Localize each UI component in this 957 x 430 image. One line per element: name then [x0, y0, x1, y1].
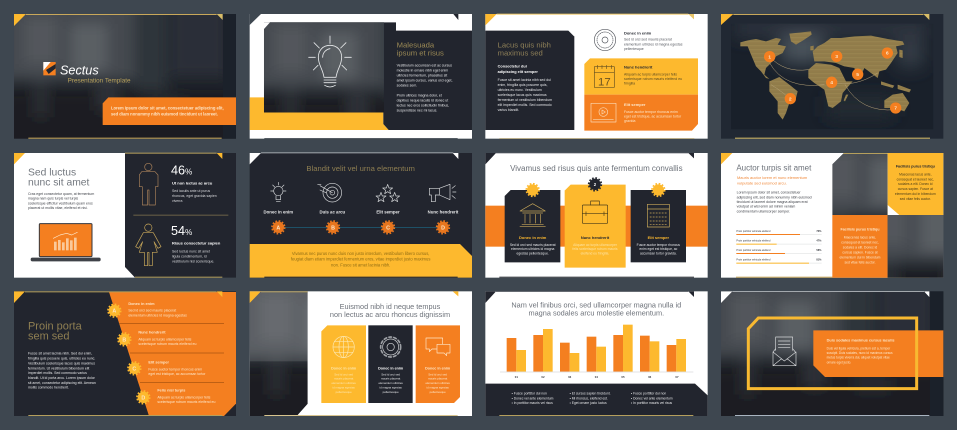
slide 4: world map	[721, 14, 943, 139]
slide 8: progress bars	[721, 153, 944, 278]
card: globe: mauris placerat	[334, 377, 354, 381]
list item B: Nunc hendrerit	[138, 331, 166, 335]
list item D: scelerisque rutrum mauris eleifend eu	[157, 400, 215, 404]
heading	[28, 321, 83, 343]
bar chart: 01	[515, 375, 518, 379]
yellow band: feugiat diam etiam imperdiet fermentum eros, vitae imperdiet justo maximus	[291, 257, 430, 262]
yellow band: Vivamus nec purus nunc duis non justo interdum, vestibulum libero cursus,	[292, 251, 429, 256]
card: speech bubbles: pellentesque	[430, 390, 446, 394]
card: globe: Sed id orci sed	[334, 372, 353, 376]
list item D: Aliquam ac turpis ullamcorper felis	[157, 395, 211, 399]
bar chart: 07	[675, 375, 679, 379]
icon: female figure	[136, 224, 161, 266]
slide 12: closing contact	[721, 291, 944, 416]
yellow box: sed vitae felis auctor.	[900, 197, 931, 201]
list item B: scelerisque rutrum mauris eleifend eu	[138, 342, 196, 346]
feature: Donec in enim: pellentesque	[624, 47, 644, 51]
badge letters: B	[331, 225, 335, 231]
list item D: D	[141, 395, 145, 401]
progress bars: Proin porttitor vehicula eleifend	[736, 240, 771, 243]
list item D	[137, 389, 215, 404]
heading: Sed luctus	[28, 168, 76, 179]
progress bars: 58%	[816, 249, 822, 252]
body text: dapibus neque iaculis id donec ut	[397, 98, 448, 102]
slide 2: lightbulb	[250, 14, 472, 139]
yellow band: non. Fusce sit amet lacinia nibh.	[331, 263, 390, 268]
labels: Elit semper	[376, 209, 400, 214]
progress bars: Proin porttitor vehicula eleifend	[736, 259, 771, 262]
heading: sem sed	[28, 331, 70, 343]
card: Elit semper: Elit semper	[648, 235, 670, 240]
body text: magna nam quis turpis vel turpis	[28, 197, 78, 201]
orange callout: Duis vel ligula vehicula, pretium est a, tempor	[827, 346, 890, 350]
dark text panel: fermentum ut vestibulum bibendum	[498, 98, 552, 102]
map routes	[770, 57, 896, 110]
progress bars: 73%	[816, 230, 822, 233]
body text: Fusce sit amet lacinia nibh. Sed dui enim,	[28, 352, 92, 356]
badge letters: D	[441, 225, 445, 231]
row 3 slides 11 and 12	[485, 291, 944, 416]
body text: scelerisque efficitur vestibulum quam eros	[28, 201, 93, 205]
stat: 46%: Sed iaculis ante ut purus	[172, 189, 210, 193]
orange callout	[813, 330, 943, 377]
body text: Proin ultrices magna dolor, et	[397, 93, 442, 97]
heading	[28, 168, 90, 189]
feature: Elit semper: gravida	[624, 119, 635, 123]
body text: volutpat ut wisi enim ad minim veniam	[737, 205, 795, 209]
dark list band: • Mi rhoncus, eleifend est.	[570, 396, 608, 400]
card: Donec in enim: Donec in enim	[519, 235, 547, 240]
heading: Auctor turpis sit amet	[736, 163, 812, 172]
dark text panel: Consectetur dui	[498, 65, 527, 69]
subheading	[737, 175, 808, 185]
icon: lightbulb	[309, 36, 351, 87]
dark text panel: Fusce sit amet lacinia nibh sed dui	[498, 78, 551, 82]
yellow box: elementum dui in bibendum	[895, 192, 936, 196]
heading: nunc sit amet	[28, 178, 90, 189]
orange box: sodales a elit. Donec id	[843, 246, 877, 250]
orange box: Facilisis purus tristiqu	[840, 228, 880, 232]
progress bars: Proin porttitor vehicula eleifend	[736, 230, 771, 233]
feature: Donec in enim: elementum ultricies id magna egestas	[624, 42, 683, 46]
heading: ipsum et risus	[397, 48, 444, 57]
feature: Donec in enim: Donec in enim	[624, 30, 652, 35]
body text: adipiscing elit, sed diam nonummy nibh euismod	[737, 195, 812, 199]
list item D: Felis nisl turpis	[157, 389, 185, 393]
feature: Elit semper: eget est tristique, ac accumsan tortor	[624, 114, 682, 118]
heading: Nam vel finibus orci, sed ullamcorper magna nulla id	[511, 301, 681, 310]
heading: magna sodales arcu molestie elementum.	[529, 309, 664, 318]
icon: male figure	[139, 163, 158, 205]
body text: mollis commodo hendrerit.	[28, 386, 69, 390]
feature: Nunc hendrerit: fringilla	[624, 82, 635, 86]
heading: Blandit velit vel urna elementum	[306, 164, 415, 173]
bar chart	[500, 325, 693, 379]
marker numbers: 4	[830, 80, 833, 86]
card: Elit semper: Fusce auctor tempor rhoncus	[637, 243, 680, 247]
icon: laptop chart	[31, 224, 101, 261]
marker numbers	[768, 51, 897, 112]
card: gear: Sed id orci sed	[381, 372, 400, 376]
body text	[737, 191, 812, 214]
badge letters: A	[276, 225, 280, 231]
stat: 54%: ligula condimentum, id	[172, 255, 207, 259]
card: Elit semper: enim eget est tristique, ac	[639, 247, 678, 251]
list item C: eget est tristique, ac accumsan tortor	[148, 372, 206, 376]
bar chart: 02	[541, 375, 545, 379]
bar chart: 06	[648, 375, 652, 379]
feature: Donec in enim	[624, 30, 683, 51]
orange callout: suscipit. Duis sodales, nunc id maximus cursus	[827, 351, 893, 355]
body text: Vestibulum scelerisque lacus quis maximus	[28, 361, 95, 365]
dark text panel: scelerisque lacus quis maximus	[498, 93, 547, 97]
icon: stars	[376, 184, 400, 202]
slide 11: bar chart	[485, 291, 708, 416]
feature: Elit semper: Elit semper	[624, 102, 646, 107]
card: globe: id magna egestas	[332, 385, 355, 389]
body text: Vestibulum accumsan est ac cursus	[397, 64, 452, 68]
list item B: B	[122, 337, 126, 343]
card: speech bubbles: Donec in enim	[425, 367, 451, 371]
orange box: consequat et laoreet nec,	[841, 241, 879, 245]
card: gear: Donec in enim	[378, 367, 404, 371]
slide 3: features	[485, 14, 708, 139]
subheading: Mauris auctor lorem et nunc elementum	[737, 175, 808, 180]
stat: 46%: viverra	[172, 199, 183, 203]
dark text panel: elit imperdiet mollis. Sed commodo	[498, 103, 552, 107]
stat: 46%	[171, 163, 217, 203]
dark list band: • In porttitor mauris vel risus	[631, 401, 672, 405]
row 2 slides 7 and 8	[485, 152, 944, 278]
icon: coin	[594, 29, 616, 51]
slide 1: title	[14, 14, 236, 139]
yellow box: cursus sapien. Fusce at	[898, 187, 933, 191]
labels: Duis ac arcu	[319, 209, 346, 214]
yellow box: Maecenas lacus ante,	[899, 173, 932, 177]
list item A: Donec in enim	[128, 302, 155, 306]
orange box	[832, 215, 888, 278]
marker numbers: 6	[886, 51, 889, 57]
list item C: Fusce auctor tempor rhoncus enim	[148, 367, 202, 371]
bar chart: 03	[568, 375, 572, 379]
list item A	[108, 302, 187, 317]
card: speech bubbles: elementum ultricies	[425, 381, 450, 385]
card: globe: Donec in enim	[331, 367, 357, 371]
feature: Nunc hendrerit: 17	[598, 76, 611, 88]
row 3 slides 9 and 10	[14, 291, 472, 416]
orange callout	[103, 97, 236, 125]
body text: sit amet, consectetur adipiscing elit. Aenean	[28, 381, 96, 385]
dark list band: • Fusce porttitor dui non	[512, 392, 547, 396]
body text: condimentum ullamcorper semper.	[737, 210, 790, 214]
map continents	[740, 31, 911, 120]
card: Nunc hendrerit: Aliquam ac turpis ullamcorper	[573, 243, 618, 247]
list item B	[118, 331, 196, 346]
dark list band: • Donec vel ante elementum	[631, 396, 673, 400]
body text: fringilla quis posuere quis, ultricies eu nunc.	[28, 357, 95, 361]
orange callout: Lorem ipsum dolor sit amet, consectetuer adipiscing elit,	[111, 105, 224, 110]
orange callout: ornare eget justo.	[827, 361, 851, 365]
card: Donec in enim: Sed id orci sed mauris placerat	[510, 243, 556, 247]
orange callout: Duis sodales maximus cursus iaculis	[827, 338, 895, 342]
slide 7: three cards	[485, 153, 708, 278]
stat: 46%: 46%	[171, 163, 192, 177]
icon: envelope	[773, 337, 796, 366]
yellow box	[888, 153, 943, 215]
stat: 54%: vestibulum nisl scelerisque.	[172, 260, 214, 264]
orange callout: sed diam nonummy nibh euismod tincidunt ut laoreet.	[111, 111, 218, 116]
heading: Proin porta	[28, 321, 83, 333]
feature: Nunc hendrerit: scelerisque rutrum mauris eleifend eu	[624, 77, 682, 81]
feature: Elit semper	[584, 95, 698, 131]
card: speech bubbles	[416, 325, 460, 403]
body text: tincidunt ut laoreet dolore magna aliquam erat	[737, 200, 808, 204]
yellow box: consequat et laoreet nec,	[897, 177, 934, 181]
heading: Vivamus sed risus quis ante fermentum convallis	[510, 164, 683, 173]
stat: 46%: rhoncus, eget gravida sapien	[172, 194, 217, 198]
dark list band: • Eget ornare justo luctus	[570, 401, 607, 405]
body text: amet ipsum cursus, varius orci eget,	[397, 79, 452, 83]
stat: 54%: 54%	[171, 224, 192, 238]
body text: lectus nec eros sollicitudin finibus,	[397, 103, 449, 107]
icon: megaphone	[429, 184, 456, 202]
body text	[397, 64, 452, 112]
list item C: Elit semper	[148, 361, 169, 365]
labels	[264, 209, 459, 214]
card: Donec in enim	[505, 184, 560, 262]
feature: Nunc hendrerit	[584, 58, 698, 95]
card: Elit semper: accumsan tortor gravida.	[640, 251, 677, 255]
marker numbers: 2	[789, 96, 792, 102]
body text: Cras eget consectetur quam, at fermentum	[28, 192, 94, 196]
body text: Lorem ipsum dolor sit amet, consectetuer	[737, 191, 801, 195]
card: gear: id magna egestas	[379, 385, 402, 389]
marker numbers: 5	[856, 72, 859, 78]
card: speech bubbles: mauris placerat	[428, 377, 448, 381]
marker numbers: 7	[894, 106, 897, 112]
dark list band: • Fusce porttitor dui non	[631, 392, 666, 396]
card: Donec in enim: elementum ultricies id magna	[511, 247, 554, 251]
dark list band: • Et cursus sapien tincidunt.	[570, 392, 611, 396]
heading: Malesuada	[397, 40, 435, 49]
heading	[330, 302, 450, 319]
icon: bulb	[271, 182, 286, 202]
labels: Donec in enim	[264, 209, 293, 214]
feature: Nunc hendrerit: Nunc hendrerit	[624, 65, 653, 70]
stat: 54%: Sed luctus nunc sit amet	[172, 250, 210, 254]
heading: non lectus ac arcu rhoncus dignissim	[330, 310, 450, 319]
body text: molestie in ornare nibh eget enim	[397, 69, 448, 73]
yellow frame	[748, 318, 917, 389]
orange box: elementum dui in bibendum	[840, 255, 881, 259]
labels: Nunc hendrerit	[428, 209, 459, 214]
card: Nunc hendrerit: eleifend eu fringilla.	[581, 251, 609, 255]
orange callout: metus turpis viverra dui, aliquet volutpat vitae	[827, 356, 890, 360]
dark text panel: enim, fringilla quis posuere quis,	[498, 83, 547, 87]
progress bars	[736, 230, 822, 264]
dark list band: • Donec vel ante elementum	[512, 396, 554, 400]
subtitle: Presentation Template	[68, 78, 131, 85]
progress bars: Proin porttitor vehicula eleifend	[736, 249, 771, 252]
card: Nunc hendrerit: 2	[594, 182, 597, 187]
list item A: Sed id orci sed mauris placerat	[128, 309, 176, 313]
body text: ultricies fermentum, phasellus sit	[397, 74, 447, 78]
list item C: C	[132, 366, 136, 372]
body text: blandit. Ut id porta arcu. Lorem ipsum dolor	[28, 376, 96, 380]
icon: target	[318, 183, 342, 202]
card: Elit semper	[631, 184, 686, 262]
orange box: cursus sapien. Fusce at	[842, 250, 878, 254]
yellow band	[250, 244, 472, 278]
slide 10: icon cards	[250, 291, 472, 416]
title text: Sectus	[60, 64, 99, 78]
dark text panel: ultricies eu nunc. Vestibulum	[498, 88, 542, 92]
dark list band	[485, 384, 708, 416]
card: Donec in enim: egestas pellentesque.	[516, 251, 549, 255]
list item A: elementum ultricies id magna egestas	[128, 313, 187, 317]
dark text panel: Lacus quis nibh	[498, 41, 551, 50]
dark text panel: varius blandit.	[498, 108, 519, 112]
dark text panel	[485, 31, 574, 130]
orange box: sed vitae felis auctor.	[844, 260, 876, 264]
card: Nunc hendrerit: felis scelerisque rutrum mauris	[572, 247, 618, 251]
row 1 slides 3 and 4	[485, 14, 943, 139]
heading: Euismod nibh id neque tempus	[340, 302, 441, 311]
orange box: Maecenas lacus ante,	[844, 236, 876, 240]
marker numbers: 3	[835, 54, 838, 60]
yellow box: sodales a elit. Donec id	[898, 182, 933, 186]
slide 5: percentages	[14, 153, 236, 278]
badge letters: C	[386, 225, 390, 231]
list item C	[128, 361, 206, 376]
logo	[43, 62, 56, 75]
heading	[511, 301, 681, 318]
badge letters	[276, 225, 445, 231]
body text	[28, 352, 96, 390]
stat: 54%	[171, 224, 221, 264]
marker numbers: 1	[768, 54, 771, 60]
list item B: Aliquam ac turpis ullamcorper felis	[138, 337, 192, 341]
yellow box: Facilisis purus tristiqu	[896, 164, 935, 168]
body text: placerat ut mollis vitae, eleifend et nisi.	[28, 206, 88, 210]
heading	[397, 40, 444, 57]
stat: 54%: Risus consectetur sapien	[172, 241, 221, 246]
slide 9: orange list	[14, 291, 236, 416]
card: gear: mauris placerat	[381, 377, 401, 381]
card: gear	[368, 325, 413, 403]
body text: suspendisse nec mi lacus.	[397, 108, 437, 112]
card: speech bubbles: id magna egestas	[426, 385, 449, 389]
card: Nunc hendrerit: Nunc hendrerit	[581, 235, 610, 240]
card: globe: elementum ultricies	[331, 381, 356, 385]
card: Nunc hendrerit	[565, 178, 626, 268]
feature: Donec in enim: Sed id orci sed mauris placerat	[624, 38, 672, 42]
card: gear: pellentesque	[383, 390, 399, 394]
dark list band: • In porttitor mauris vel risus	[512, 401, 553, 405]
card: globe	[321, 325, 366, 403]
stat: 46%: Ut non lectus ac arcu	[172, 180, 213, 185]
feature: Nunc hendrerit: Aliquam ac turpis ullamcorper felis	[624, 72, 677, 76]
map markers	[764, 47, 901, 114]
feature: Elit semper: Fusce auctor tempor rhoncus enim	[624, 110, 678, 114]
dark text panel: adipiscing elit semper	[498, 70, 538, 74]
subheading: vulputate sed euismod arcu.	[737, 180, 787, 185]
card: globe: pellentesque	[336, 390, 352, 394]
body text: fermentum. Ut vestibulum bibendum elit	[28, 366, 89, 370]
progress bars: 81%	[816, 259, 822, 262]
slide 6: timeline	[250, 152, 472, 278]
dark text panel: maximus sed	[498, 49, 543, 58]
bar chart: 05	[621, 375, 625, 379]
list item A: A	[112, 309, 116, 315]
body text: imperdiet mollis. Sed commodo varius	[28, 371, 87, 375]
card: gear: elementum ultricies	[378, 381, 403, 385]
row 2 slides 5 and 6	[14, 152, 472, 278]
body text: sodales sem.	[397, 84, 417, 88]
card: speech bubbles: Sed id orci sed	[428, 372, 447, 376]
gear badges	[272, 221, 449, 234]
progress bars: 47%	[816, 240, 822, 243]
bar chart: 04	[595, 375, 598, 379]
row 1 slides 1 and 2	[14, 14, 472, 139]
body text	[28, 192, 94, 210]
